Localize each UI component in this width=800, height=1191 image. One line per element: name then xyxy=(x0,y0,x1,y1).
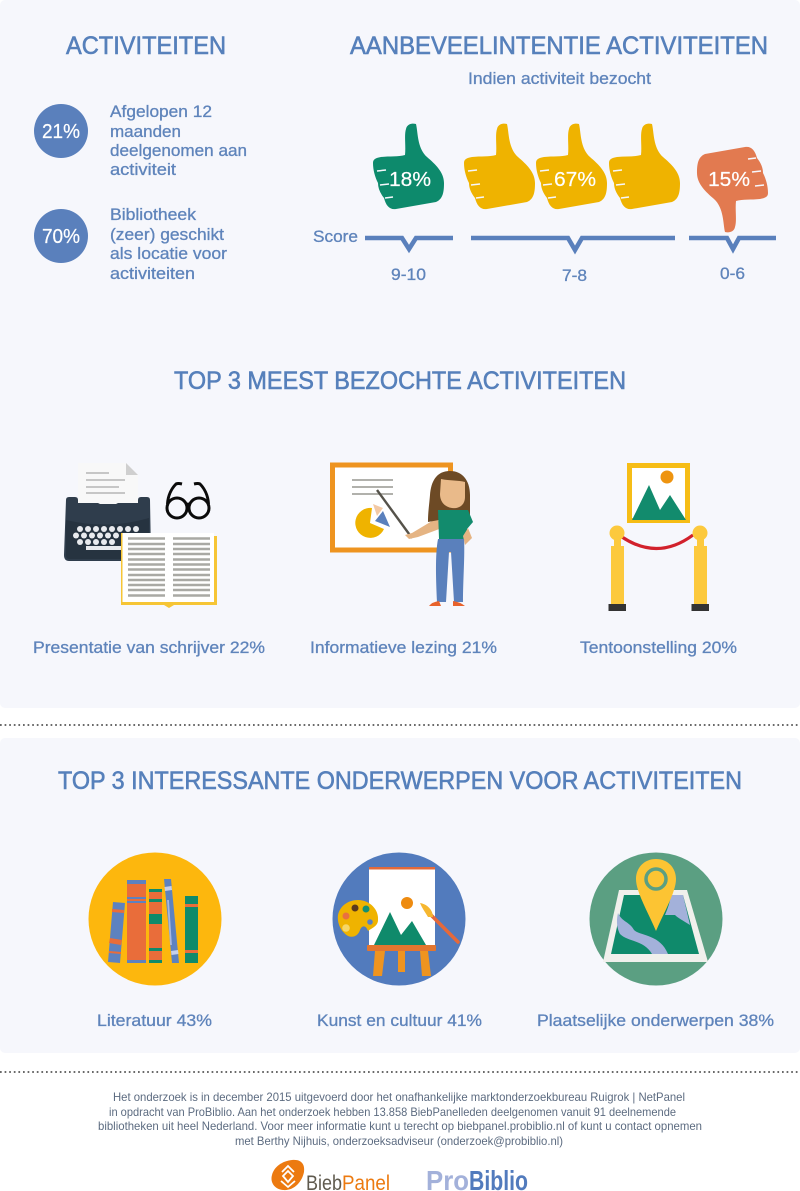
caption: presentatie van schrijver: Presentatie van schrijver 22% xyxy=(33,639,265,657)
caption: literatuur: Literatuur 43% xyxy=(97,1012,212,1030)
stat: 70 percent: Bibliotheek xyxy=(110,206,197,224)
caption: tentoonstelling: Tentoonstelling 20% xyxy=(580,639,737,657)
icon: exhibition painting with rope xyxy=(608,466,709,611)
heading: top 3 meest bezochte activiteiten: TOP 3 MEEST BEZOCHTE ACTIVITEITEN xyxy=(174,367,626,395)
score scale xyxy=(313,228,776,285)
stat: 21 percent: 21% xyxy=(42,121,80,143)
icon: green thumb up 18 percent: 18% xyxy=(389,169,431,191)
subheading: indien activiteit bezocht: Indien activiteit bezocht xyxy=(468,70,651,88)
stat: 21 percent: deelgenomen aan xyxy=(110,142,247,160)
stat: 21 percent: activiteit xyxy=(110,161,176,179)
icon: presentation board with woman xyxy=(332,465,473,606)
stat: 21 percent xyxy=(34,103,247,179)
heading: aanbeveelintentie: AANBEVEELINTENTIE ACTIVITEITEN xyxy=(350,32,768,60)
footer text: met Berthy Nijhuis, onderzoeksadviseur (onderzoek@probiblio.nl) xyxy=(235,1134,563,1148)
footer text: bibliotheken uit heel Nederland. Voor meer informatie kunt u terecht op biebpanel.probiblio.nl of kunt u contact opnemen xyxy=(98,1119,702,1133)
stat: 70 percent: (zeer) geschikt xyxy=(110,226,224,244)
icon: orange thumb down 15 percent xyxy=(697,147,768,232)
stat: 70 percent: activiteiten xyxy=(110,265,195,283)
footer text xyxy=(98,1090,702,1148)
icon: typewriter xyxy=(64,463,151,561)
panel: interesting topics background xyxy=(0,738,800,1053)
icon: yellow thumbs up 67 percent xyxy=(464,124,680,209)
stat: 70 percent xyxy=(34,206,228,283)
logo: biebpanel xyxy=(271,1160,390,1191)
footer text: in opdracht van ProBiblio. Aan het onderzoek hebben 13.858 BiebPanelleden deelgenomen vanuit 91 deelnemende xyxy=(109,1105,676,1119)
icon: green thumb up 18 percent xyxy=(373,124,444,209)
caption: informatieve lezing: Informatieve lezing 21% xyxy=(310,639,497,657)
score scale: Score xyxy=(313,228,358,246)
icon: open book xyxy=(121,533,217,608)
icon: glasses xyxy=(167,484,209,518)
heading: top 3 interessante onderwerpen: TOP 3 INTERESSANTE ONDERWERPEN VOOR ACTIVITEITEN xyxy=(58,767,742,795)
heading: activiteiten: ACTIVITEITEN xyxy=(66,32,226,60)
panel: top section background xyxy=(0,0,800,708)
score scale: 0-6 xyxy=(720,265,745,283)
score scale: 9-10 xyxy=(391,266,426,284)
stat: 70 percent: 70% xyxy=(42,226,80,248)
caption: plaatselijke onderwerpen: Plaatselijke onderwerpen 38% xyxy=(537,1012,774,1030)
stat: 21 percent: maanden xyxy=(110,123,181,141)
icon: books on yellow circle xyxy=(88,852,222,986)
stat: 70 percent: als locatie voor xyxy=(110,245,228,263)
icon: orange thumb down 15 percent: 15% xyxy=(708,169,750,191)
caption: kunst en cultuur: Kunst en cultuur 41% xyxy=(317,1012,482,1030)
logo: probiblio xyxy=(426,1165,528,1191)
stat: 21 percent: Afgelopen 12 xyxy=(110,103,212,121)
footer text: Het onderzoek is in december 2015 uitgevoerd door het onafhankelijke marktonderzoekbureau Ruigrok | NetPanel xyxy=(113,1090,685,1104)
icon: map with pin on green circle xyxy=(590,852,722,986)
icon: easel on blue circle xyxy=(332,852,466,986)
score scale: 7-8 xyxy=(562,267,587,285)
icon: yellow thumbs up 67 percent: 67% xyxy=(554,169,596,191)
